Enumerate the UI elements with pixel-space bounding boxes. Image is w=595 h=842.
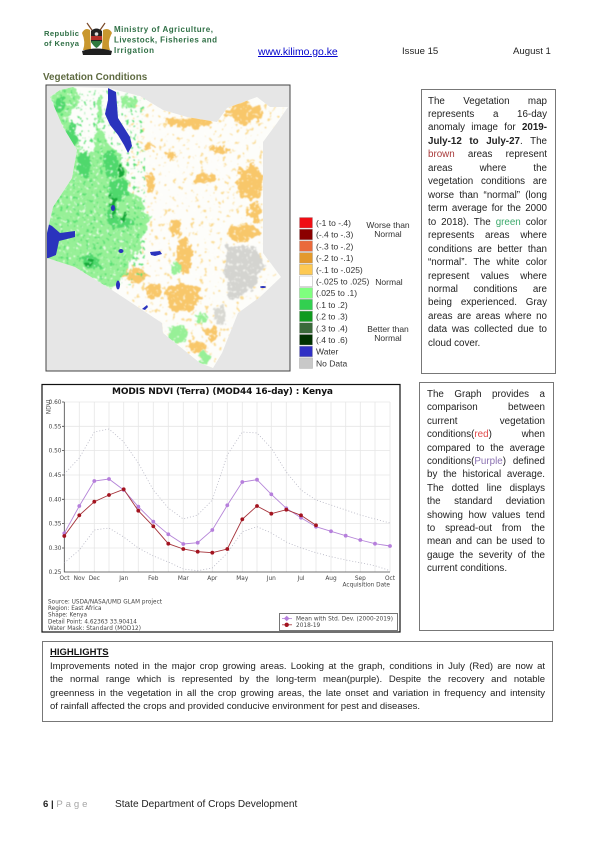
footer: department name: State Department of Crops Development [115, 799, 297, 810]
legend labels [316, 218, 370, 368]
panel: vegetation map description: represents a 16-day [428, 109, 547, 120]
logo text: Republic of Kenya [44, 29, 80, 48]
panel: vegetation map description: The Vegetation map [428, 96, 547, 106]
x-axis labels: Oct [385, 576, 396, 582]
legend labels: (-.025 to .025) [316, 276, 370, 286]
panel: vegetation map description: July-12 to July-27. The [428, 136, 547, 147]
map layer: gray no-data area [224, 245, 264, 300]
panel: graph description: the standard deviation [427, 496, 545, 507]
map layer: scattered orange east [125, 95, 290, 370]
legend labels: (.2 to .3) [316, 312, 348, 322]
x-axis labels: Sep [355, 576, 366, 582]
chart source notes: Shape: Kenya [48, 613, 87, 619]
panel: graph description [419, 382, 554, 631]
legend category labels: Normal [374, 229, 402, 239]
panel: graph description: The Graph provides a [427, 389, 545, 400]
panel: graph description: conditions(Purple) defined [427, 456, 545, 467]
panel: vegetation map description [421, 89, 556, 374]
legend labels: (-.2 to -.1) [316, 253, 353, 263]
map layer: orange below-normal areas [107, 103, 263, 352]
panel: graph description: current vegetation [427, 416, 545, 427]
y-axis labels: 0.45 [49, 473, 62, 479]
panel: vegetation map description: “normal”. The white color [428, 257, 547, 268]
legend labels: (.4 to .6) [316, 335, 348, 345]
chart legend [280, 614, 398, 630]
chart title: MODIS NDVI (Terra) (MOD44 16-day) : Kenya [112, 387, 333, 397]
map layer: light green above-normal areas [44, 86, 210, 365]
highlights text: of rainfall affected the crops and provided conducive environment for pest and diseases. [50, 701, 420, 712]
y-axis labels: 0.55 [49, 424, 62, 430]
current series 2018-19 (red) [62, 487, 318, 555]
y-axis labels: 0.35 [49, 522, 62, 528]
panel: vegetation map description: vegetation conditions are [428, 176, 547, 187]
panel: vegetation map description: areas where the [428, 163, 547, 174]
panel: graph description: current conditions. [427, 563, 507, 574]
x-axis labels [59, 576, 396, 588]
panel: graph description: by the historical average. [427, 469, 545, 480]
x-axis labels: Apr [207, 576, 218, 582]
chart legend: 2018-19 [296, 623, 321, 629]
mean series (purple) [62, 477, 392, 548]
issue number: Issue 15 [402, 46, 438, 57]
logo text: Republic of Kenya: of Kenya [44, 39, 80, 48]
y-axis labels: 0.50 [49, 449, 62, 455]
panel: graph description: to spread-out from the [427, 523, 545, 534]
legend labels: Water [316, 347, 339, 357]
panel: graph description: mean and can be used to [427, 536, 545, 547]
panel: graph description: showing how values tend [427, 510, 545, 521]
map layer: lakes [46, 88, 266, 310]
panel: vegetation map description: data was collected due to [428, 324, 547, 335]
map layer: vegetation colours softened [44, 84, 291, 372]
y-axis labels: 0.30 [49, 546, 62, 552]
panel: vegetation map description: represent values where [428, 270, 547, 282]
legend labels: (.3 to .4) [316, 323, 348, 333]
x-axis labels: Acquisition Date [343, 582, 390, 588]
panel: graph description: The dotted line displays [427, 483, 545, 494]
map legend [299, 217, 410, 369]
panel: vegetation map description: represents areas where [428, 230, 547, 241]
highlights text: the normal range which is represented by the long-term mean(purple). Despite the recovery and notable [50, 674, 545, 685]
panel: graph description: gauge the severity of the [427, 550, 545, 561]
map layer: medium green mottling [50, 90, 145, 285]
logo text: ministry name: Irrigation [114, 46, 154, 55]
chart source notes: Water Mask: Standard (MOD12) [48, 626, 141, 632]
y-axis labels: 0.60 [49, 400, 62, 406]
panel: graph description: compared to the average [427, 443, 545, 454]
legend category labels: Normal [374, 333, 402, 343]
heading: Vegetation Conditions: Vegetation Conditions [43, 72, 147, 83]
chart legend: Mean with Std. Dev. (2000-2019) [296, 617, 393, 623]
legend labels: (-.1 to -.025) [316, 265, 363, 275]
x-axis labels: May [236, 576, 249, 582]
chart source notes: Detail Point: 4.62363 33.90414 [48, 619, 137, 625]
highlights text [50, 661, 545, 712]
panel: vegetation map description: anomaly image for 2019- [428, 122, 547, 133]
panel: vegetation map description: worse than “normal” (long [428, 190, 547, 201]
logo text: Republic of Kenya: Republic [44, 29, 79, 38]
x-axis labels: Dec [89, 576, 100, 582]
panel: vegetation map description: term average for the 2000 [428, 203, 547, 214]
y-axis labels: 0.25 [49, 570, 62, 576]
legend labels: (-.4 to -.3) [316, 230, 353, 240]
legend labels: (.1 to .2) [316, 300, 348, 310]
y-axis labels: 0.40 [49, 497, 62, 503]
header logo: Republic of Kenya ministry [44, 22, 217, 55]
x-axis labels: Jan [118, 576, 128, 582]
map layer: fine white mottling [45, 84, 291, 372]
highlights text: Improvements noted in the major crop growing areas. Looking at the graph, conditions in July (Red) are now at [50, 661, 545, 672]
x-axis labels: Aug [325, 576, 337, 582]
highlights heading: HIGHLIGHTS [50, 647, 109, 658]
legend category labels: Better than [367, 324, 409, 334]
x-axis labels: Jul [296, 576, 305, 582]
panel: vegetation map description: brown areas represent [428, 149, 547, 160]
y-axis labels: NDVI [46, 400, 52, 414]
panel: graph description: conditions(red) when [427, 429, 545, 440]
panel: vegetation map description: areas are areas where no [428, 311, 547, 322]
footer: page number: 6 | Page [43, 799, 90, 810]
panel: vegetation map description: being experienced. Gray [428, 297, 547, 308]
chart source notes: Region: East Africa [48, 606, 102, 612]
legend labels: (-1 to -.4) [316, 218, 351, 228]
x-axis labels: Oct [59, 576, 70, 582]
logo text: ministry name: Livestock, Fisheries and [114, 36, 217, 44]
x-axis labels: Nov [74, 576, 86, 582]
legend swatches [300, 218, 312, 368]
standard deviation dotted lines [64, 429, 390, 571]
logo text: ministry name: Ministry of Agriculture, [114, 25, 213, 34]
y-axis labels [46, 400, 62, 576]
panel: graph description: comparison between [427, 402, 545, 413]
chart: MODIS NDVI line graph [41, 384, 401, 633]
icon: Kenya coat of arms [82, 23, 112, 55]
map layer: dark green areas [83, 164, 128, 266]
panel: vegetation map description: normal conditions are [428, 284, 547, 295]
chart source notes [48, 599, 163, 632]
legend category labels [366, 220, 410, 343]
legend labels: (.025 to .1) [316, 288, 357, 298]
chart source notes: Source: USDA/NASA/UMD GLAM project [48, 599, 163, 605]
legend labels: (-.3 to -.2) [316, 241, 353, 251]
panel: vegetation map description: to 2018). The green color [428, 217, 547, 228]
x-axis labels: Feb [148, 576, 159, 582]
map: vegetation anomaly of Kenya [46, 84, 290, 372]
panel: highlights [42, 641, 553, 722]
highlights text: greenness in the vegetation in all the crop growing areas, the late onset and variation in frequency and intensity [50, 688, 545, 699]
legend labels: No Data [316, 358, 347, 368]
legend category labels: Normal [375, 277, 403, 287]
logo text: ministry name [114, 25, 217, 55]
website link: www.kilimo.go.ke [258, 47, 338, 58]
legend category labels: Worse than [366, 220, 410, 230]
x-axis labels: Mar [178, 576, 189, 582]
panel: vegetation map description: conditions are better than [428, 244, 547, 255]
x-axis labels: Jun [266, 576, 276, 582]
panel: vegetation map description: cloud cover. [428, 338, 480, 349]
date: August 1 [513, 46, 551, 57]
map layer: medium green areas [54, 98, 134, 267]
